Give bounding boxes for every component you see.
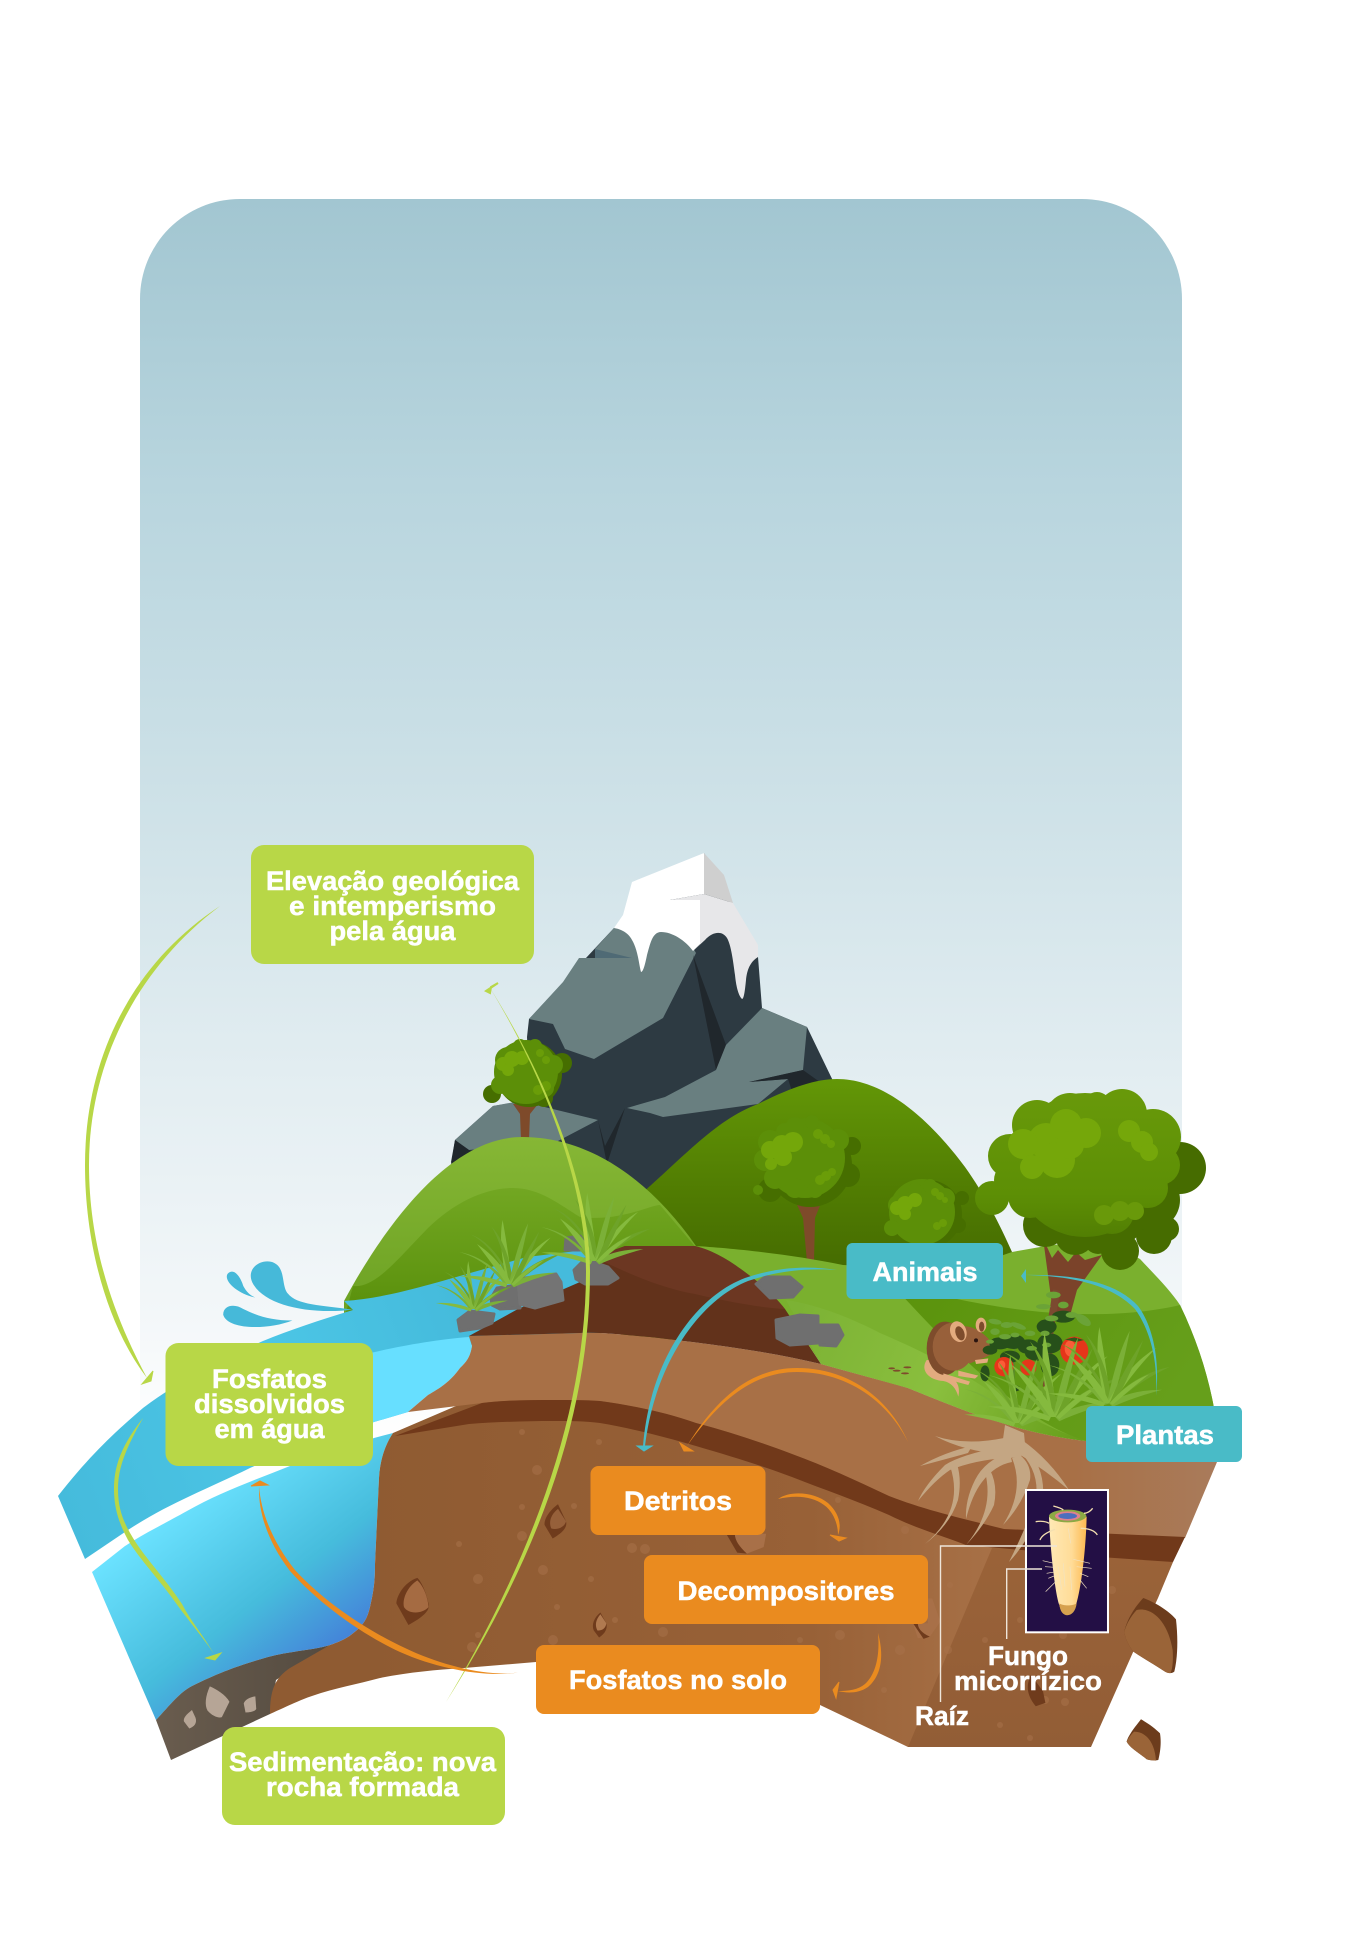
- small tree on back hill: [884, 1179, 969, 1248]
- tomato plant: [980, 1290, 1093, 1393]
- sediment layer with pebbles: [156, 1645, 330, 1760]
- back hill, right: [620, 1079, 1012, 1340]
- big tree: [975, 1089, 1206, 1312]
- snow cap: [614, 853, 758, 999]
- arrow: soil phosphates to dissolved phosphates: [251, 1481, 521, 1674]
- grass tufts on mound: [436, 1193, 650, 1311]
- label: Sedimentação: rocha formada: [266, 1772, 460, 1802]
- foreground green slope and hill: [695, 1244, 1214, 1445]
- tree on left hill: [483, 1039, 572, 1140]
- water splash: [223, 1261, 353, 1327]
- label: Plantas: [1086, 1406, 1242, 1462]
- left hill: [344, 1137, 700, 1320]
- soil right block: [908, 1540, 1173, 1747]
- label: Animais: [846, 1243, 1003, 1299]
- loose rock chunks at right edge: [1124, 1598, 1177, 1761]
- grey rocks: [458, 1235, 843, 1346]
- dark mound: [469, 1246, 821, 1364]
- label: Decompositores: Decompositores: [678, 1576, 894, 1606]
- front water block: [92, 1433, 393, 1720]
- label: Fungo micorrízico: [954, 1641, 1102, 1696]
- label: Elevação geológica: e intemperismo: [289, 891, 496, 921]
- mouse: [888, 1318, 996, 1397]
- label: Sedimentação: Sedimentação: nova: [229, 1747, 497, 1777]
- label: Fosfatos dissolvidos: dissolvidos: [194, 1389, 345, 1419]
- grass tufts at plant base: [964, 1327, 1170, 1426]
- arrow: uplift to dissolved phosphates: [85, 906, 220, 1384]
- label: Fungo micorrízico: micorrízico: [954, 1666, 1102, 1696]
- plant roots: [918, 1425, 1069, 1562]
- arrow: sedimentation to uplift: [446, 983, 590, 1702]
- arrow: plants to detritus: [680, 1368, 908, 1451]
- soil main block: [270, 1400, 1000, 1747]
- label: Fosfatos no solo: Fosfatos no solo: [569, 1665, 787, 1695]
- label: Animais: Animais: [872, 1257, 978, 1287]
- sky background panel: [140, 199, 1182, 1440]
- label: Plantas: Plantas: [1116, 1420, 1214, 1450]
- upper soil layer: [408, 1333, 1217, 1538]
- label: Fosfatos dissolvidos: Fosfatos: [212, 1364, 327, 1394]
- leader lines: [940, 1546, 1057, 1702]
- mountain: [451, 853, 835, 1300]
- label: Detritos: [590, 1466, 766, 1535]
- label: Sedimentação: [222, 1727, 505, 1825]
- arrow: plants to animals: [1021, 1269, 1157, 1396]
- arrow: detritus to decomposers: [778, 1493, 846, 1541]
- arrow: animals to detritus: [637, 1268, 837, 1451]
- label: Fosfatos no solo: [536, 1645, 820, 1714]
- label: Raíz: Raíz: [915, 1701, 969, 1731]
- inset: mycorrhizal root: [1026, 1490, 1108, 1632]
- soil specks: [456, 1429, 1116, 1741]
- label: Elevação geológica: [251, 845, 534, 964]
- label: Elevação geológica: pela água: [330, 916, 456, 946]
- label: Elevação geológica: Elevação geológica: [266, 866, 520, 896]
- arrow: decomposers to soil phosphates: [833, 1633, 881, 1698]
- label: Fungo micorrízico: Fungo: [988, 1641, 1068, 1671]
- label: Fosfatos dissolvidos: [166, 1343, 373, 1466]
- label: Fosfatos dissolvidos: em água: [214, 1414, 325, 1444]
- tree on back hill: [753, 1115, 861, 1262]
- label: Decompositores: [644, 1555, 928, 1624]
- arrow: dissolved phosphates to sediment: [114, 1418, 221, 1660]
- river and upper water surface: [58, 1250, 610, 1559]
- label: Detritos: Detritos: [624, 1486, 732, 1516]
- dark soil stripe: [395, 1400, 1185, 1562]
- rocks embedded in soil: [396, 1504, 1045, 1706]
